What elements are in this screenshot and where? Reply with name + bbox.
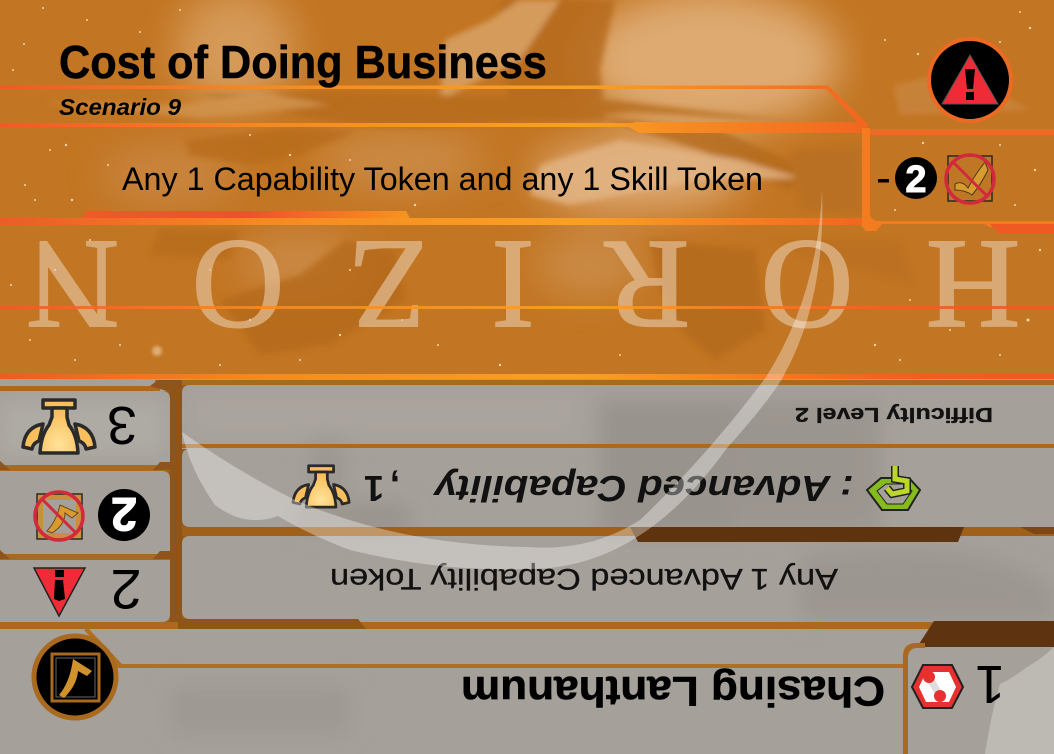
icon: red info triangle [34, 568, 85, 616]
subtitle: scenario: Scenario 9 [59, 94, 181, 120]
text: advanced token cost: Any 1 Advanced Capability Token [330, 562, 838, 595]
icon: green capability hexagon [867, 466, 920, 510]
icon: no capability token [35, 492, 83, 540]
number: 3: 3 [107, 395, 137, 455]
title: Cost of Doing Business [59, 36, 547, 88]
icon: red hexagon [912, 665, 963, 708]
icon: warning badge [929, 39, 1011, 121]
body text: cost: Any 1 Capability Token and any 1 Skill Token [122, 161, 763, 197]
heading: advanced capability effect: : Advanced Capability [432, 468, 854, 509]
icon: black 2 token: 2 [905, 159, 927, 201]
watermark: HORIZON lettering: I [492, 214, 534, 356]
minus sign [878, 179, 889, 182]
heading: card name: Chasing Lanthanum [461, 668, 885, 715]
watermark: HORIZON lettering: R [604, 214, 690, 356]
number: card cost 1: 1 [975, 654, 1005, 714]
cost: minus two skill tokens [878, 155, 994, 203]
icon: black 2 token inverted [98, 488, 150, 541]
icon: gold cup large [23, 400, 95, 453]
brown frame of lower panel [0, 380, 1054, 754]
panel: orange scenario background [0, 0, 1054, 378]
orange frame lines [0, 86, 1054, 379]
watermark: HORIZON lettering: O [761, 214, 853, 356]
watermark: HORIZON lettering: N [27, 214, 119, 356]
icon: no skill token [946, 155, 994, 203]
icon: gold cup small [293, 466, 349, 507]
watermark: HORIZON lettering [27, 214, 1020, 356]
swoosh: crescent [182, 190, 822, 569]
stars field [10, 7, 1041, 366]
watermark: HORIZON lettering: Z [349, 214, 427, 356]
number: 2: 2 [110, 558, 142, 621]
text: difficulty level: Difficulty Level 2 [795, 403, 993, 425]
icon: capability badge [34, 636, 116, 718]
heading: advanced capability effect: , 1 [364, 468, 400, 509]
watermark: HORIZON lettering: H [926, 214, 1020, 356]
panel: grey capability background [0, 378, 1054, 754]
watermark: HORIZON lettering: O [192, 214, 284, 356]
icon: black 2 token inverted: 2 [111, 488, 137, 541]
